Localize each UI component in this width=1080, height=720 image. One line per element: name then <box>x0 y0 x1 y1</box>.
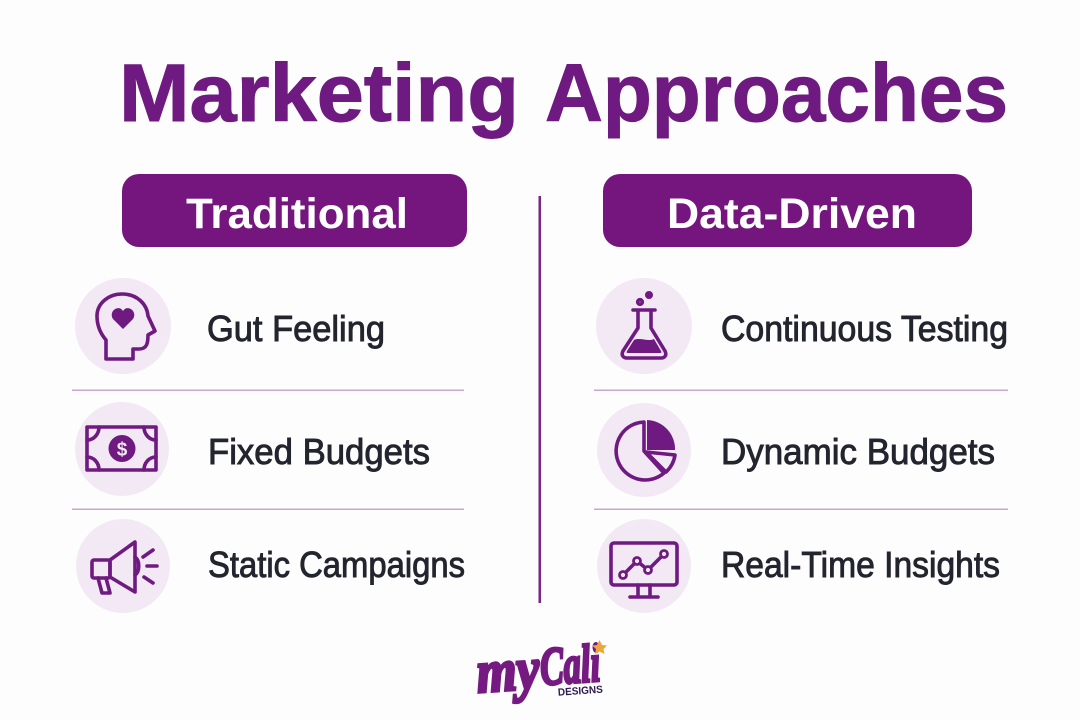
panel: traditional column <box>75 174 467 613</box>
icon: megaphone <box>92 542 157 593</box>
row: real-time insights: Real-Time Insights <box>721 544 1000 585</box>
icon: head with heart <box>97 294 155 359</box>
row: real-time insights <box>597 519 1000 613</box>
logo: myCali Designs: my <box>474 635 542 705</box>
icon: flask <box>622 291 666 358</box>
icon: monitor with line chart <box>611 543 677 597</box>
row: static campaigns: Static Campaigns <box>208 544 465 585</box>
title: Approaches <box>545 48 1008 139</box>
logo: myCali Designs: Cali <box>538 633 602 697</box>
panel: data-driven column <box>596 174 1008 613</box>
row: gut feeling <box>75 278 385 374</box>
row: dynamic budgets: Dynamic Budgets <box>721 431 995 472</box>
row: continuous testing: Continuous Testing <box>721 308 1008 349</box>
row: fixed budgets <box>75 402 430 496</box>
heading: Traditional <box>122 174 467 247</box>
icon: pie chart <box>616 420 675 480</box>
row: dynamic budgets <box>597 403 995 497</box>
row: gut feeling: Gut Feeling <box>207 308 385 349</box>
row: continuous testing <box>596 278 1008 374</box>
heading: Data-Driven <box>603 174 972 247</box>
icon: banknote: $ <box>117 440 128 460</box>
row: fixed budgets: Fixed Budgets <box>208 431 430 472</box>
icon: banknote <box>87 427 156 470</box>
heading: Traditional: Traditional <box>186 190 408 238</box>
title <box>119 48 1008 139</box>
title: Marketing <box>119 48 519 139</box>
icon: star <box>592 640 607 654</box>
logo: myCali Designs <box>474 631 607 705</box>
row: static campaigns <box>76 519 465 613</box>
heading: Data-Driven: Data-Driven <box>667 190 917 238</box>
logo: myCali Designs: DESIGNS <box>558 684 603 699</box>
